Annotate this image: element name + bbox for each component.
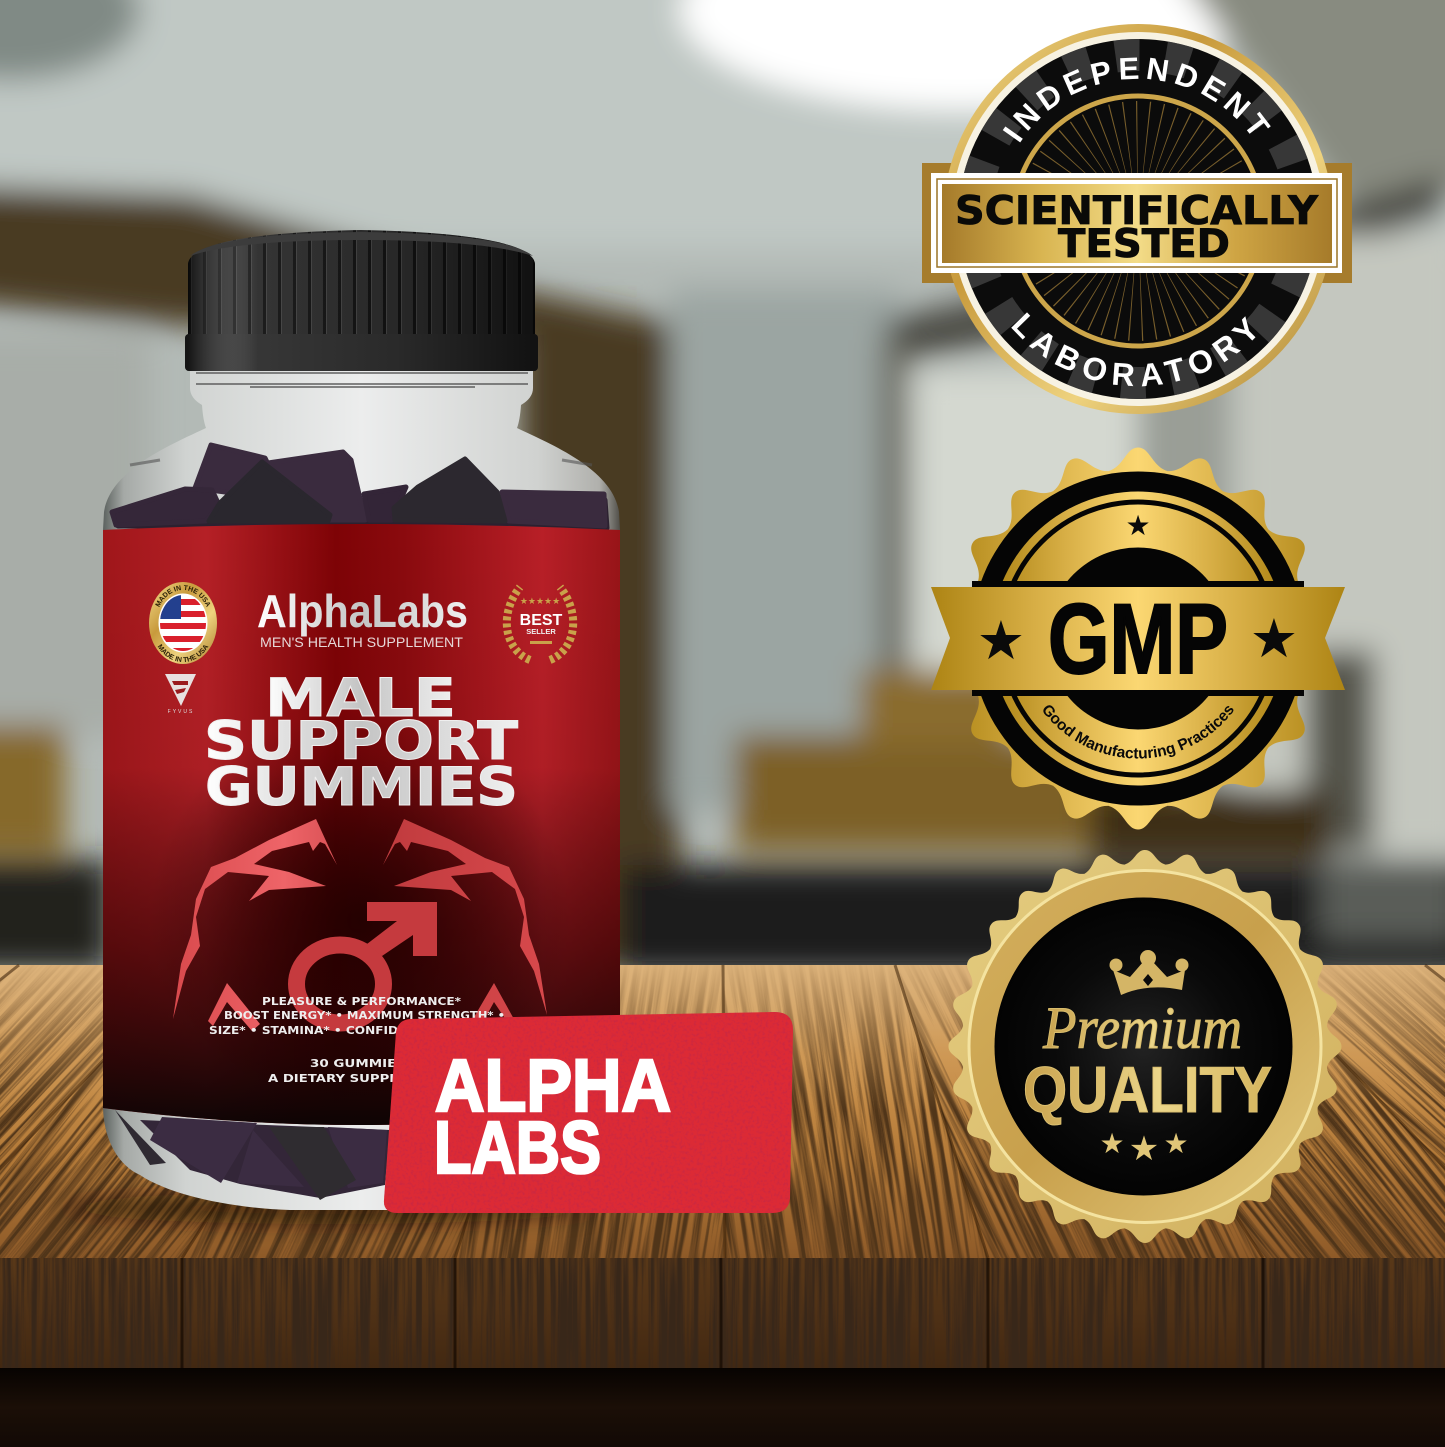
table lower edge — [0, 1368, 1445, 1447]
gummies bottom — [115, 1110, 390, 1200]
GMP text: GMP — [1048, 583, 1228, 694]
USA seal: MADE IN THE USA — [158, 644, 208, 662]
benefits text: A DIETARY SUPPLEMENT — [268, 1072, 450, 1085]
curved text: independent: INDEPENDENT — [1002, 58, 1271, 142]
curved text: laboratory: LABORATORY — [1011, 312, 1256, 386]
scientifically tested banner: TESTED — [1058, 222, 1230, 267]
ribbon stars: ★ — [977, 611, 1025, 671]
product title — [204, 668, 518, 818]
red product label — [103, 524, 620, 1125]
product title: SUPPORT — [204, 711, 518, 772]
benefits text: SIZE* • STAMINA* • CONFIDENCE* — [209, 1024, 440, 1037]
bottle cap — [185, 230, 538, 371]
FYVUS logo — [165, 674, 196, 715]
badge: premium quality — [946, 848, 1344, 1246]
wooden table top — [0, 965, 1445, 1260]
crown icon — [1110, 950, 1188, 995]
gummies top — [112, 445, 607, 528]
three stars — [1099, 1128, 1189, 1168]
best seller wreath: ★★★★★ — [520, 596, 560, 606]
product title: GUMMIES — [205, 757, 518, 818]
best seller wreath: BEST — [520, 612, 563, 629]
benefits text: PLEASURE & PERFORMANCE* — [262, 995, 461, 1008]
USA seal — [149, 582, 217, 664]
red Alpha Labs tag: LABS — [434, 1106, 601, 1189]
badge: independent laboratory scientifically tested — [922, 24, 1352, 414]
quality text: QUALITY — [1023, 1053, 1272, 1126]
muscular torso icon — [173, 819, 547, 1031]
gold ribbon — [931, 587, 1345, 690]
male symbol — [296, 902, 437, 1023]
product title: MALE — [265, 668, 456, 729]
red Alpha Labs tag: ALPHA — [435, 1044, 671, 1127]
FYVUS logo: FYVUS — [168, 709, 194, 715]
product bottle — [103, 230, 620, 1210]
premium script: Premium — [1042, 995, 1242, 1061]
three stars: ★ — [1163, 1128, 1189, 1159]
scientifically tested banner: SCIENTIFICALLY — [955, 189, 1319, 234]
table front face — [0, 1258, 1445, 1368]
benefits text: 30 GUMMIES — [310, 1057, 406, 1070]
glass body — [103, 370, 620, 1210]
best seller wreath — [507, 587, 573, 660]
scientifically tested banner — [931, 173, 1342, 273]
ribbon stars — [977, 609, 1298, 671]
top star: ★ — [1125, 510, 1151, 541]
badge: GMP — [931, 448, 1345, 830]
curved text: good manufacturing practices: Good Manufacturing Practices — [1043, 705, 1234, 759]
benefits text — [209, 995, 505, 1085]
best seller wreath: SELLER — [526, 627, 556, 636]
USA seal: MADE IN THE USA — [155, 585, 210, 608]
three stars: ★ — [1099, 1128, 1125, 1159]
three stars: ★ — [1129, 1130, 1159, 1168]
bottle shadow — [60, 1192, 600, 1224]
ribbon stars: ★ — [1250, 609, 1298, 669]
benefits text: BOOST ENERGY* • MAXIMUM STRENGTH* • — [224, 1009, 505, 1022]
brand subtitle: MEN'S HEALTH SUPPLEMENT — [260, 635, 463, 650]
red Alpha Labs tag — [380, 1010, 796, 1216]
blurred room background — [0, 0, 1445, 975]
brand name: AlphaLabs — [257, 585, 468, 637]
